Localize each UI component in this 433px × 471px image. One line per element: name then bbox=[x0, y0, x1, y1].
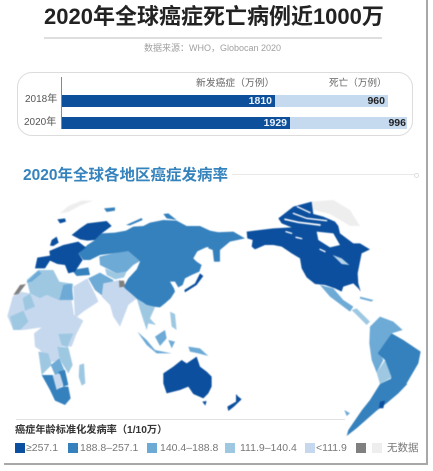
East Africa bbox=[58, 333, 73, 347]
Arctic islands bbox=[104, 207, 115, 212]
legend panel: <111.9 bbox=[316, 442, 347, 454]
legend item 4 bbox=[225, 442, 297, 454]
Mexico bbox=[320, 285, 353, 312]
legend item 1 bbox=[15, 442, 58, 454]
UK bbox=[50, 237, 59, 246]
Central America bbox=[352, 308, 370, 325]
column heading: new cases: 新发癌症（万例） bbox=[196, 78, 274, 89]
Africa north bbox=[27, 270, 73, 300]
map: Europe, Asia, Africa, Oceania bbox=[7, 201, 220, 406]
Australia bbox=[163, 357, 212, 398]
legend item 5 bbox=[305, 442, 347, 454]
South Asia bbox=[102, 280, 137, 327]
Mozambique dark bbox=[58, 370, 68, 387]
panel: bar chart bbox=[17, 72, 413, 136]
West Africa patches bbox=[23, 293, 35, 311]
Egypt bbox=[59, 283, 73, 300]
bar 2020 new cases: 1929 bbox=[264, 117, 287, 129]
title: 2020年全球癌症死亡病例近1000万 bbox=[44, 4, 384, 29]
legend panel bbox=[15, 419, 418, 454]
Arabia bbox=[73, 278, 98, 318]
Sakhalin and Kamchatka bbox=[213, 247, 220, 262]
Tasmania bbox=[202, 401, 207, 406]
Angola bbox=[38, 352, 52, 375]
Philippines bbox=[170, 312, 177, 330]
legend title: 癌症年龄标准化发病率（1/10万） bbox=[15, 425, 167, 436]
legend panel: 188.8–257.1 bbox=[80, 442, 138, 454]
bar 2018 deaths: 960 bbox=[367, 95, 385, 107]
bar 2020 deaths: 996 bbox=[388, 117, 406, 129]
row label 2018: 2018年 bbox=[25, 94, 57, 105]
Bolivia and Paraguay bbox=[377, 360, 392, 384]
Pakistan no data mark bbox=[119, 281, 125, 287]
legend panel: 140.4–188.8 bbox=[160, 442, 218, 454]
Central Asia bbox=[105, 268, 127, 279]
bar 2020 deaths bbox=[290, 117, 407, 129]
Iran and Afghanistan bbox=[88, 273, 113, 297]
New Zealand bbox=[227, 394, 242, 411]
legend item 7 bbox=[372, 442, 418, 454]
map: Americas bbox=[208, 200, 421, 436]
legend item 2 bbox=[68, 442, 138, 454]
legend item 6 bbox=[356, 443, 366, 453]
Scandinavia bbox=[72, 221, 112, 241]
Southern Africa bbox=[42, 375, 71, 405]
row label 2020: 2020年 bbox=[24, 117, 56, 128]
bar 2018 new cases bbox=[62, 95, 275, 107]
polar no-data sliver bbox=[60, 201, 93, 213]
Madagascar bbox=[79, 363, 85, 386]
Indonesia bbox=[137, 332, 172, 353]
Zambia, Zimbabwe bbox=[51, 358, 65, 375]
Caribbean bbox=[360, 297, 373, 302]
world map bbox=[7, 200, 422, 436]
Japan bbox=[184, 273, 203, 292]
South Pacific islands bbox=[344, 410, 350, 416]
bar 2018 deaths bbox=[275, 95, 388, 107]
Northern South America bbox=[369, 317, 403, 373]
bar 2018 new cases: 1810 bbox=[249, 95, 272, 107]
Botswana bbox=[53, 374, 63, 390]
legend item 3 bbox=[147, 442, 218, 454]
Tanzania and Mozambique bbox=[57, 347, 73, 373]
Europe mainland bbox=[35, 242, 86, 273]
Great Lakes bbox=[333, 255, 349, 265]
Argentina and Chile bbox=[347, 378, 407, 436]
Brazil bbox=[378, 333, 421, 387]
legend panel: 111.9–140.4 bbox=[240, 442, 297, 454]
legend panel: 无数据 bbox=[387, 442, 418, 454]
Iceland bbox=[57, 218, 66, 223]
Russia, China, Mongolia bbox=[78, 220, 220, 307]
bar 2020 new cases bbox=[62, 117, 290, 129]
column heading: deaths: 死亡（万例） bbox=[329, 78, 387, 89]
New Guinea bbox=[188, 347, 208, 356]
source note: 数据来源：WHO，Globocan 2020 bbox=[144, 43, 281, 53]
Morocco bbox=[26, 271, 42, 283]
Uruguay bbox=[379, 401, 385, 408]
Arctic channels bbox=[285, 207, 327, 252]
map heading: 2020年全球各地区癌症发病率 bbox=[23, 167, 228, 184]
East Siberia bbox=[208, 232, 245, 262]
axis bbox=[61, 77, 62, 129]
legend panel: ≥257.1 bbox=[26, 442, 58, 454]
Kazakhstan bbox=[99, 251, 140, 273]
Southeast Asia bbox=[137, 298, 156, 330]
Hudson Bay bbox=[317, 232, 340, 247]
Turkey bbox=[72, 267, 90, 276]
North America bbox=[247, 202, 370, 292]
Africa body bbox=[7, 292, 83, 363]
Greenland bbox=[312, 200, 360, 226]
Western Sahara bbox=[13, 284, 26, 295]
